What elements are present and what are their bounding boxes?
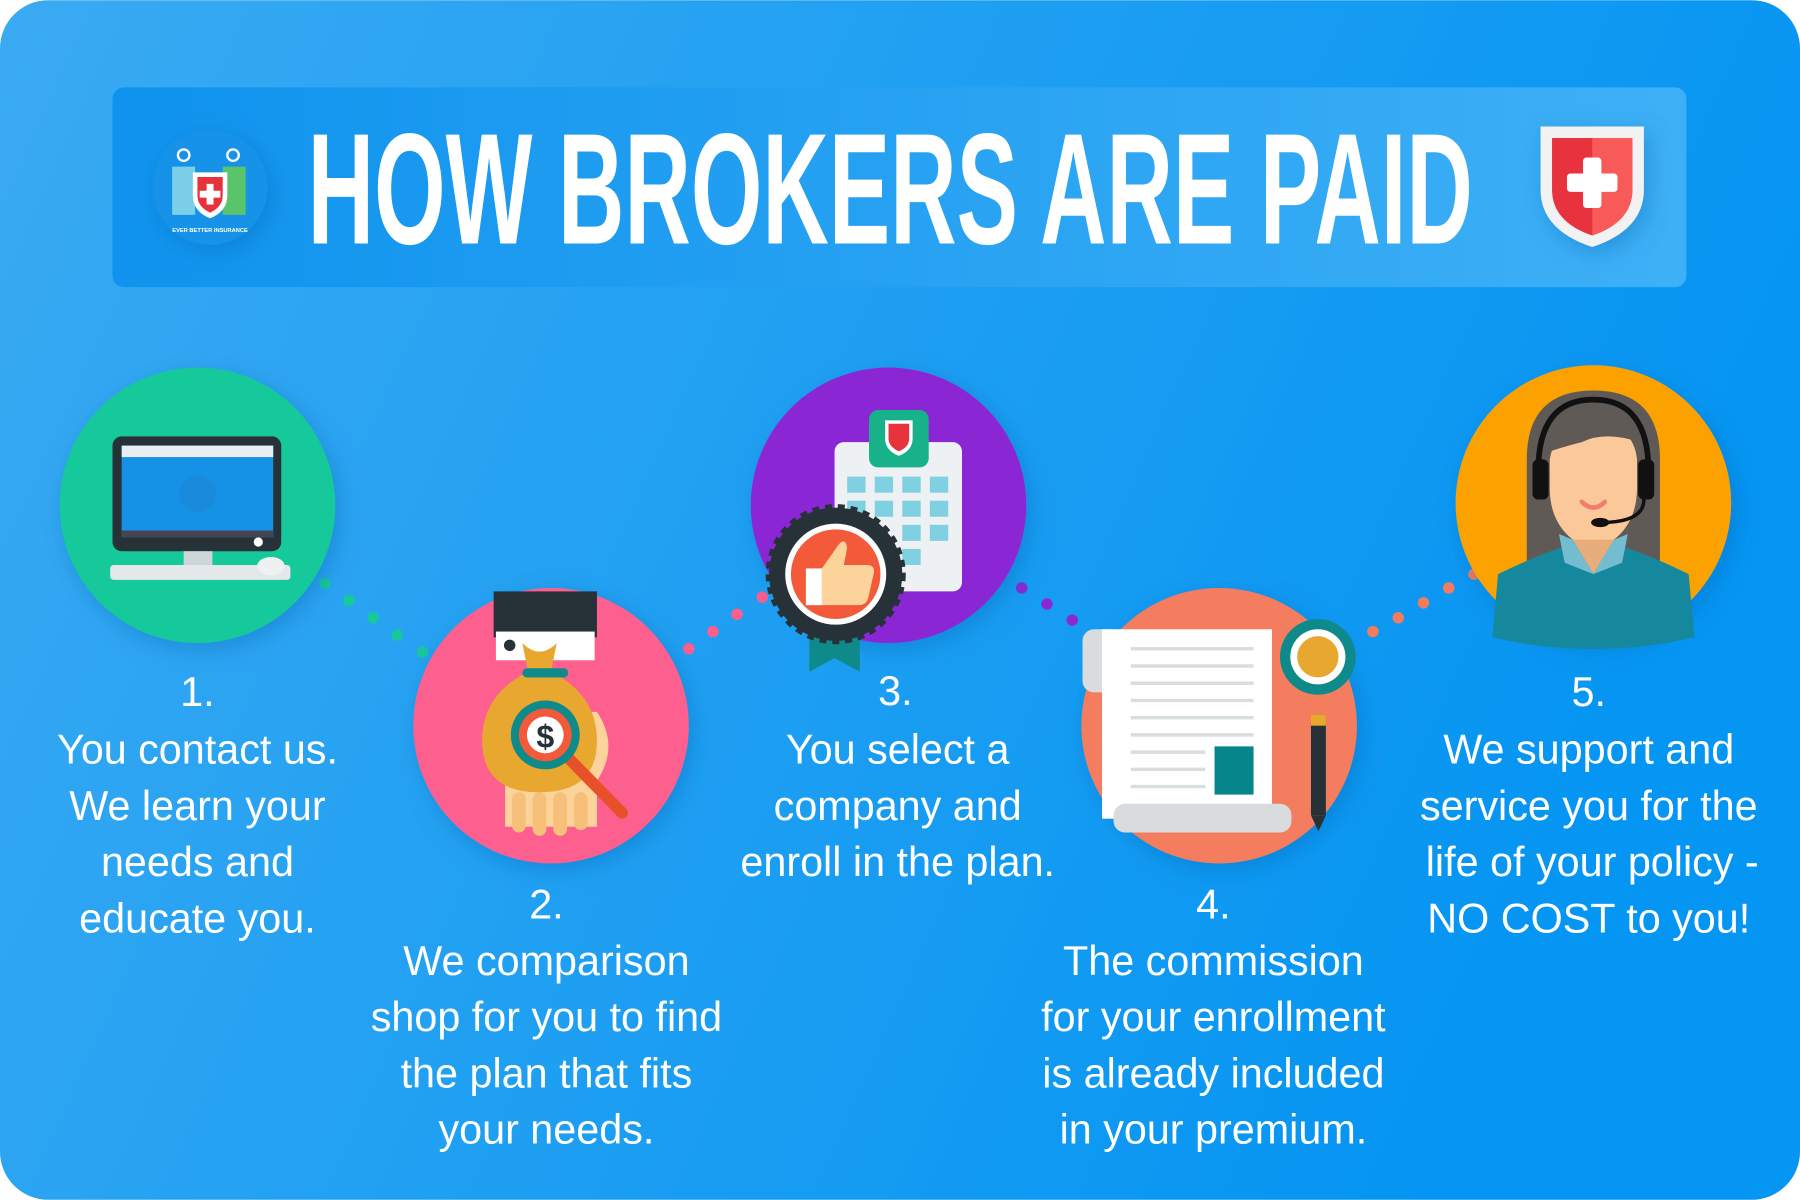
text: step 1: We learn your — [69, 783, 326, 829]
icon: building with badge — [751, 368, 1026, 672]
text: step 5: service you for the — [1420, 783, 1758, 829]
text: step 4: 4. — [1196, 882, 1231, 928]
text: step 1: educate you. — [79, 895, 316, 941]
panel: step 1 — [57, 368, 338, 941]
text: step 4 — [1041, 882, 1386, 1153]
text: step 3 — [740, 668, 1055, 885]
text: step 3: You select a — [786, 727, 1010, 773]
text: step 5: We support and — [1443, 727, 1734, 773]
text: step 4: The commission — [1063, 938, 1364, 984]
text: step 5 — [1420, 669, 1759, 941]
text: step 2: 2. — [529, 882, 564, 928]
text: step 3: enroll in the plan. — [740, 839, 1055, 885]
text: step 1 — [57, 669, 338, 941]
text: step 5: life of your policy - — [1426, 839, 1759, 885]
icon: hand with money bag: $ — [536, 719, 554, 755]
text: step 2: your needs. — [438, 1107, 654, 1153]
text: step 4: is already included — [1042, 1050, 1384, 1096]
icon: logo — [153, 130, 267, 245]
panel: step 5 — [1420, 365, 1759, 941]
panel: step 4 — [1041, 588, 1386, 1153]
icon: document with coffee — [1081, 588, 1357, 863]
text: step 1: needs and — [101, 839, 294, 885]
text: step 4: in your premium. — [1060, 1107, 1367, 1153]
text: step 5: 5. — [1572, 669, 1606, 715]
text: step 1: 1. — [180, 669, 215, 715]
icon: support agent — [1456, 365, 1731, 649]
text: step 4: for your enrollment — [1041, 994, 1386, 1040]
dotted connectors — [319, 568, 1480, 658]
icon: shield — [1541, 126, 1644, 247]
text: step 3: 3. — [878, 668, 913, 714]
text: step 3: company and — [774, 783, 1022, 829]
icon: computer — [60, 368, 335, 643]
panel: step 2 — [371, 588, 722, 1153]
header bar — [112, 87, 1686, 287]
icon: logo: EVER BETTER INSURANCE — [172, 228, 248, 234]
text: step 2: shop for you to find — [371, 994, 722, 1040]
panel: step 3 — [740, 368, 1055, 885]
icon: hand with money bag — [413, 588, 689, 863]
text: step 2: the plan that fits — [401, 1050, 692, 1096]
text: step 2 — [371, 882, 722, 1153]
text: step 5: NO COST to you! — [1427, 895, 1750, 941]
text: step 2: We comparison — [403, 938, 690, 984]
text: step 1: You contact us. — [57, 727, 338, 773]
